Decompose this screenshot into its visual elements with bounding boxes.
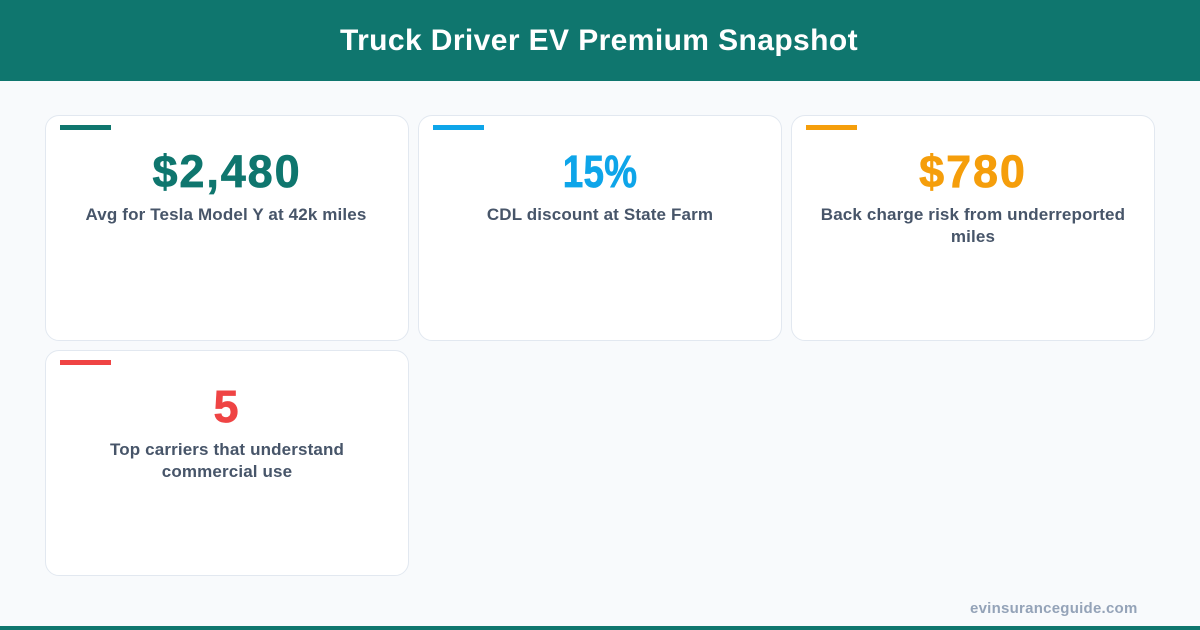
accent bar: amber (806, 125, 857, 130)
label: Tesla Model Y average: Avg for Tesla Model Y at 42k miles (86, 205, 366, 224)
panel: top carriers (45, 350, 409, 576)
accent bar: red (60, 360, 111, 365)
title banner: Truck Driver EV Premium Snapshot (340, 24, 858, 57)
stat: 15%: 15% (563, 146, 637, 197)
title banner (0, 0, 1200, 81)
stat: $780: $780 (919, 146, 1027, 197)
label: back charge risk: Back charge risk from underreported miles (821, 205, 1125, 246)
source website: evinsuranceguide.com (970, 600, 1138, 617)
accent bar: blue (433, 125, 484, 130)
accent bar: teal (60, 125, 111, 130)
panel: back charge risk (791, 115, 1155, 341)
label: State Farm discount: CDL discount at State Farm (487, 205, 713, 224)
panel: CDL discount (418, 115, 782, 341)
footer bar (0, 626, 1200, 630)
label: commercial carriers: Top carriers that understand commercial use (110, 440, 344, 481)
panel: average premium (45, 115, 409, 341)
stat: $2,480: $2,480 (152, 146, 302, 197)
stat: 5: 5 (214, 381, 240, 432)
